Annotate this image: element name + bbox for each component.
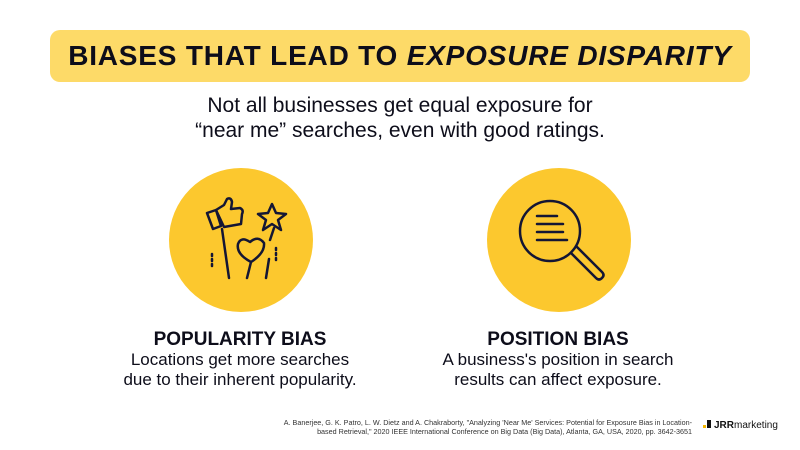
citation: A. Banerjee, G. K. Patro, L. W. Dietz and A. Chakraborty, "Analyzing 'Near Me' Services: Potential for Exposure Bias in Location- bbox=[284, 418, 692, 427]
citation: based Retrieval," 2020 IEEE International Conference on Big Data (Big Data), Atlanta, GA, USA, 2020, pp. 3642-3651 bbox=[317, 427, 692, 436]
subtitle: “near me” searches, even with good ratings. bbox=[195, 119, 605, 142]
popularity text: Locations get more searches bbox=[131, 350, 349, 369]
title banner bbox=[50, 30, 750, 82]
citation bbox=[284, 418, 692, 436]
title banner: BIASES THAT LEAD TO EXPOSURE DISPARITY bbox=[68, 40, 732, 71]
subtitle: Not all businesses get equal exposure for bbox=[207, 94, 593, 117]
position text: A business's position in search bbox=[442, 350, 674, 369]
popularity text: POPULARITY BIAS bbox=[154, 329, 326, 350]
logo: JRRmarketing bbox=[714, 420, 778, 431]
position text: POSITION BIAS bbox=[487, 329, 629, 350]
icon: popularity circle bbox=[169, 168, 313, 312]
icon: position circle bbox=[487, 168, 631, 312]
position text: results can affect exposure. bbox=[454, 370, 662, 389]
popularity text: due to their inherent popularity. bbox=[123, 370, 357, 389]
popularity text bbox=[123, 329, 357, 389]
position text bbox=[442, 329, 674, 389]
subtitle bbox=[195, 94, 605, 142]
